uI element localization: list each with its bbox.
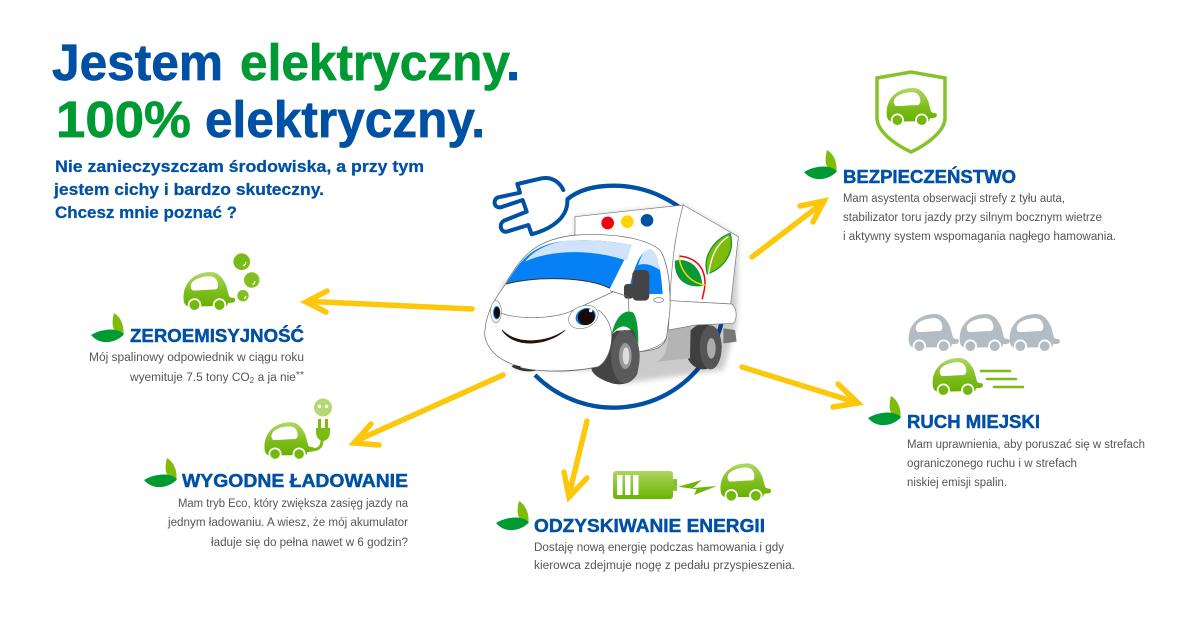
body text: a ja nie	[254, 372, 296, 384]
central truck illustration	[485, 178, 738, 408]
sprout logo	[675, 233, 731, 299]
subtitle: jestem cichy i bardzo skuteczny.	[53, 180, 324, 199]
body text: Mój spalinowy odpowiednik w ciągu roku	[89, 352, 304, 364]
panel: bezpieczeństwo	[804, 72, 1116, 243]
icon: plug	[495, 178, 567, 234]
wheel arch	[612, 312, 638, 345]
side window	[630, 249, 663, 294]
body text: jednym ładowaniu. A wiesz, że mój akumulator	[167, 517, 408, 529]
heading: BEZPIECZEŃSTWO	[843, 166, 1016, 187]
panel: odzyskiwanie energii	[496, 463, 795, 572]
arrows	[306, 201, 858, 497]
arrow: to ruch miejski	[742, 367, 858, 407]
body text: kierowca zdejmuje nogę z pedału przyspieszenia.	[534, 560, 795, 572]
body text: ograniczonego ruchu i w strefach	[907, 458, 1077, 470]
body text: stabilizator toru jazdy przy silnym bocznym wietrze	[843, 212, 1102, 224]
body text	[89, 352, 304, 385]
indicator dots	[601, 214, 653, 229]
title: .	[506, 34, 520, 91]
icon: leaf	[91, 313, 124, 342]
body text: Mam uprawnienia, aby poruszać się w strefach	[907, 439, 1145, 451]
smile	[502, 330, 565, 343]
arrow: to zeroemisyjność	[306, 291, 472, 312]
left eye	[491, 301, 501, 323]
heading: ZEROEMISYJNOŚĆ	[130, 325, 304, 346]
ring	[535, 186, 725, 408]
subtitle	[53, 157, 424, 222]
icon: leaf	[144, 458, 177, 487]
panel: ruch miejski	[868, 314, 1145, 489]
body text	[843, 193, 1116, 243]
title: elektryczny	[240, 34, 511, 91]
bumper outline	[520, 310, 612, 371]
subtitle: Nie zanieczyszczam środowiska, a przy tym	[55, 157, 424, 176]
body text: ładuje się do pełna nawet w 6 godzin?	[211, 537, 408, 549]
title: elektryczny.	[205, 91, 485, 148]
heading: ODZYSKIWANIE ENERGII	[534, 515, 765, 536]
icon: grey cars and fast green car	[909, 314, 1060, 397]
panel: wygodne ładowanie	[144, 398, 409, 549]
icon: leaf	[868, 396, 901, 425]
truck box	[575, 205, 738, 330]
truck shadow	[485, 205, 738, 383]
body text	[907, 439, 1145, 489]
icon: car with plug	[264, 398, 332, 461]
truck rear wheels and chassis	[657, 324, 737, 369]
icon: leaf	[804, 150, 837, 179]
heading: WYGODNE ŁADOWANIE	[182, 470, 408, 491]
title: Jestem	[52, 34, 223, 91]
title: 100%	[56, 91, 191, 148]
icon: shield with car	[877, 72, 945, 152]
subtitle: Chcesz mnie poznać ?	[55, 203, 237, 222]
body text: niskiej emisji spalin.	[907, 477, 1007, 489]
body text: 2	[250, 376, 255, 385]
body text	[167, 498, 409, 549]
front bumper	[520, 308, 612, 371]
right eye	[565, 301, 602, 333]
arrow: to bezpieczeństwo	[752, 201, 824, 257]
body text	[534, 542, 795, 572]
door lines	[502, 291, 667, 352]
mirror	[624, 270, 649, 301]
windshield	[506, 240, 632, 288]
arrow: to wygodne ładowanie	[354, 375, 503, 445]
body text: Dostaję nową energię podczas hamowania i gdy	[534, 542, 784, 554]
body text: **	[296, 370, 304, 381]
body text: wyemituje 7.5 tony CO	[130, 372, 246, 384]
front wheel	[512, 330, 640, 384]
icon: battery and car	[613, 463, 771, 502]
heading: RUCH MIEJSKI	[907, 411, 1040, 432]
arrow: to odzyskiwanie energii	[564, 421, 587, 497]
body text: Mam asystenta obserwacji strefy z tyłu auta,	[843, 193, 1065, 205]
body text: Mam tryb Eco, który zwiększa zasięg jazdy na	[178, 498, 409, 510]
icon: leaf	[496, 501, 529, 530]
cab	[485, 235, 670, 371]
body text: i aktywny system wspomagania nagłego hamowania.	[843, 231, 1116, 243]
panel: zeroemisyjność	[89, 253, 304, 385]
title	[52, 34, 520, 148]
icon: car with bubbles	[184, 253, 259, 312]
